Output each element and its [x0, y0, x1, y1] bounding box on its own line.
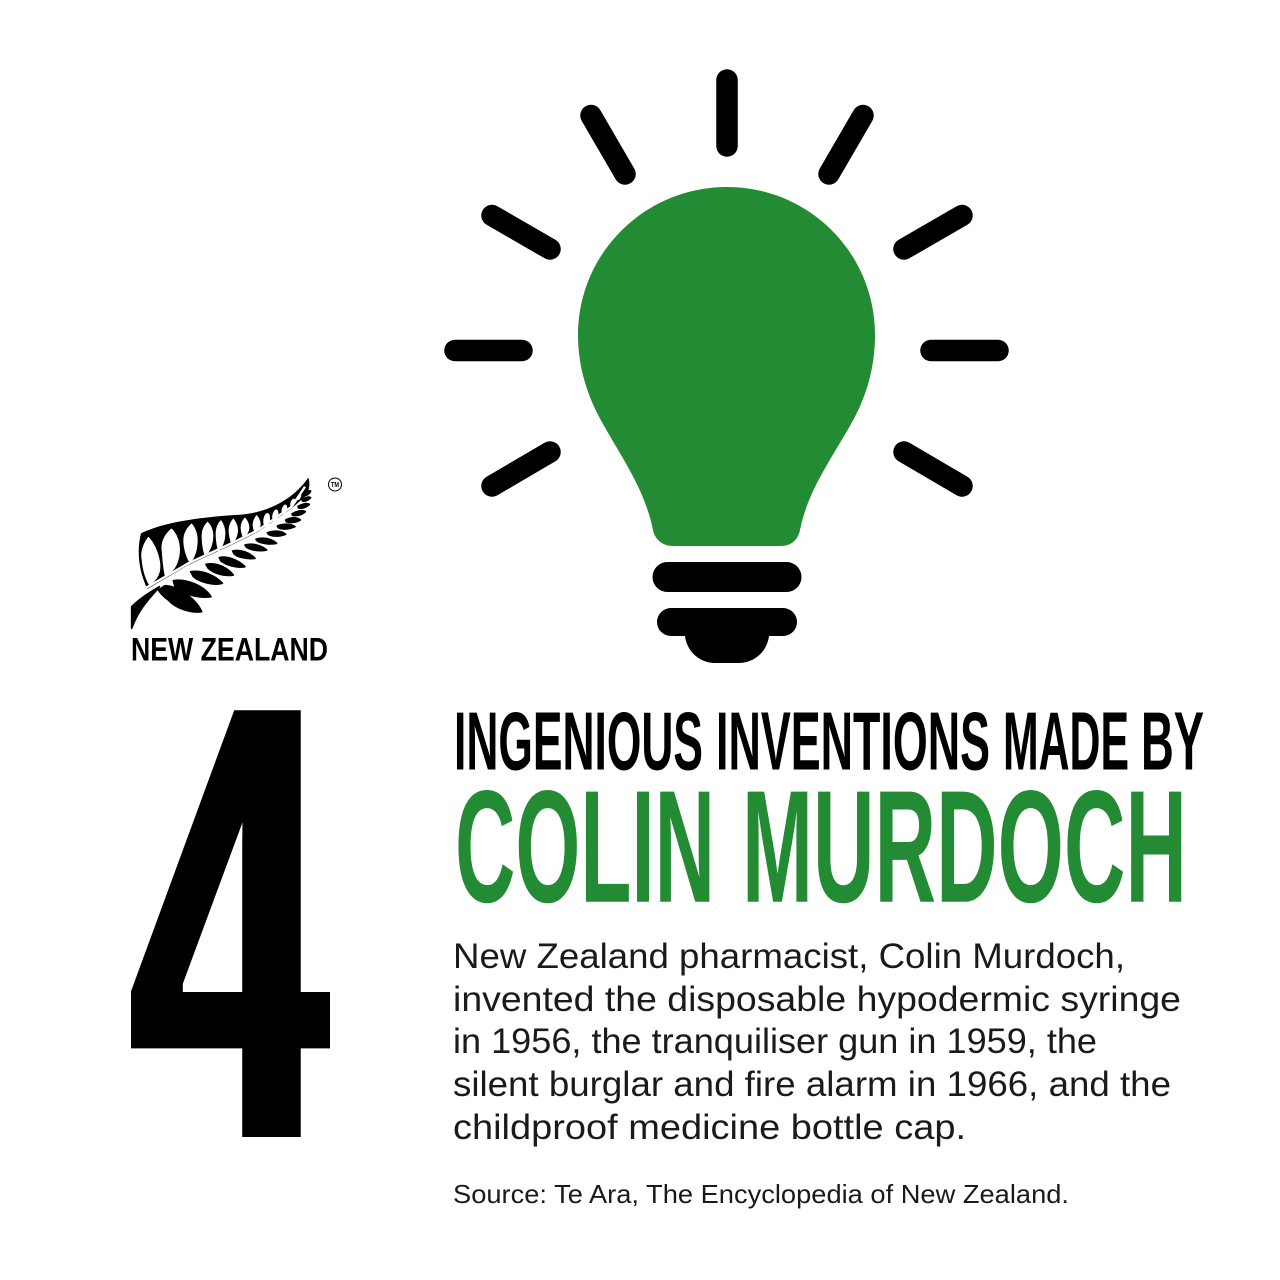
icon: light bulb — [455, 80, 998, 663]
trademark symbol — [328, 478, 342, 491]
heading line 1: BY — [1141, 695, 1204, 787]
bulb glass — [578, 187, 875, 546]
body text: silent burglar and fire alarm in 1966, and the — [453, 1065, 1171, 1104]
heading line 1: INVENTIONS — [716, 695, 990, 787]
heading line 1: INGENIOUS — [454, 695, 703, 787]
bulb base — [652, 562, 802, 663]
logo: silver fern New Zealand — [131, 478, 342, 668]
source note: Source: Te Ara, The Encyclopedia of New Zealand. — [453, 1179, 1069, 1209]
wordmark: NEW ZEALAND — [131, 632, 328, 668]
body text: New Zealand pharmacist, Colin Murdoch, — [453, 937, 1125, 976]
heading line 2: name — [455, 757, 1187, 936]
infographic canvas — [130, 69, 1204, 1208]
body text: invented the disposable hypodermic syringe — [453, 980, 1181, 1019]
fern mark — [132, 478, 311, 628]
heading line 1: MADE — [1003, 695, 1129, 787]
heading line 1 — [454, 695, 1204, 787]
light rays — [455, 80, 998, 486]
trademark symbol: TM — [331, 482, 339, 489]
body text: childproof medicine bottle cap. — [453, 1108, 966, 1147]
heading line 2: name: COLIN — [455, 757, 715, 936]
body text: in 1956, the tranquiliser gun in 1959, the — [453, 1022, 1097, 1061]
body text — [453, 937, 1181, 1147]
heading — [454, 695, 1204, 936]
big number 4: 4 — [132, 569, 332, 1275]
